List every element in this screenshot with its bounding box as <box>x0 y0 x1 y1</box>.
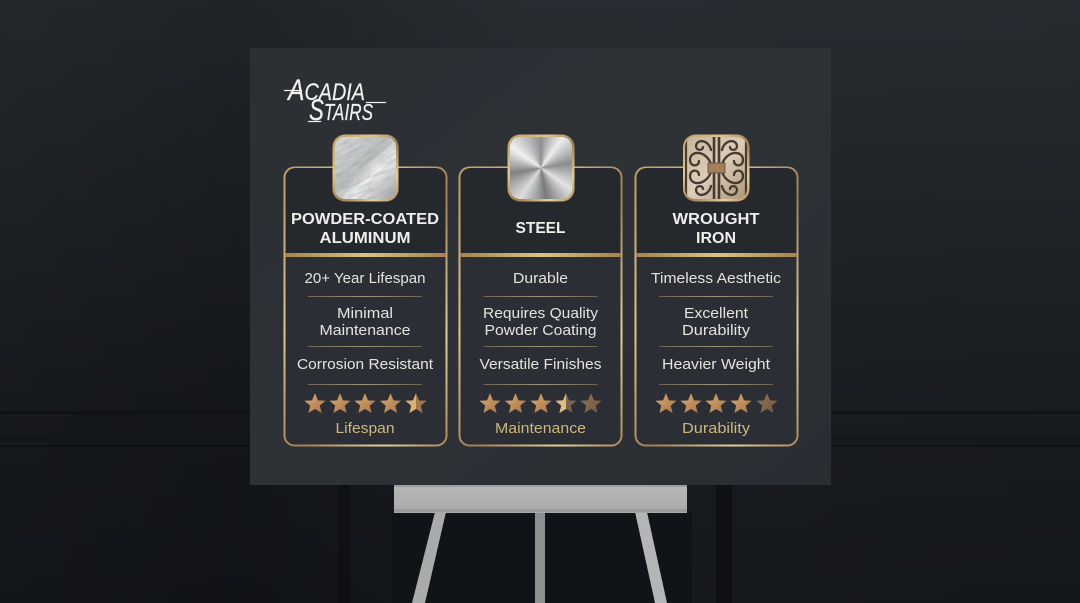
icon: brushed steel swatch <box>508 134 574 202</box>
features: Timeless Aesthetic <box>651 270 782 287</box>
heading <box>672 211 760 247</box>
heading <box>291 211 439 247</box>
features <box>651 270 782 385</box>
features: 20+ Year Lifespan <box>304 270 426 287</box>
heading: WROUGHT <box>672 211 760 228</box>
rating label: Lifespan <box>336 420 394 437</box>
features: Requires Quality <box>483 305 599 322</box>
heading: ALUMINUM <box>320 230 410 247</box>
poster board <box>250 48 831 485</box>
features: Powder Coating <box>484 322 596 339</box>
logo: Acadia Stairs <box>284 74 386 127</box>
star rating: 4.5 <box>304 393 427 413</box>
features <box>480 270 602 385</box>
features: Minimal <box>337 305 393 322</box>
features: Maintenance <box>320 322 410 339</box>
logo: Acadia Stairs: ACADIA <box>286 74 365 107</box>
card: Powder-Coated Aluminum <box>284 108 446 446</box>
features: Heavier Weight <box>662 356 771 373</box>
features: Versatile Finishes <box>480 356 602 373</box>
features: Durability <box>682 322 751 339</box>
icon: aluminum swatch <box>332 134 398 202</box>
star rating: 4 <box>655 393 778 413</box>
logo: Acadia Stairs: STAIRS <box>309 94 373 127</box>
rating label: Durability <box>682 420 751 437</box>
heading: STEEL <box>516 220 566 237</box>
rating label: Maintenance <box>495 420 586 437</box>
card: Wrought Iron <box>636 134 798 446</box>
features: Durable <box>513 270 568 287</box>
star rating: 3.5 <box>479 393 602 413</box>
heading: POWDER-COATED <box>291 211 439 228</box>
features: Excellent <box>684 305 749 322</box>
card: Steel <box>460 134 622 446</box>
features: Corrosion Resistant <box>297 356 434 373</box>
features <box>297 270 434 385</box>
icon: wrought iron scrollwork swatch <box>683 134 750 202</box>
easel <box>394 483 687 603</box>
heading: IRON <box>696 230 736 247</box>
